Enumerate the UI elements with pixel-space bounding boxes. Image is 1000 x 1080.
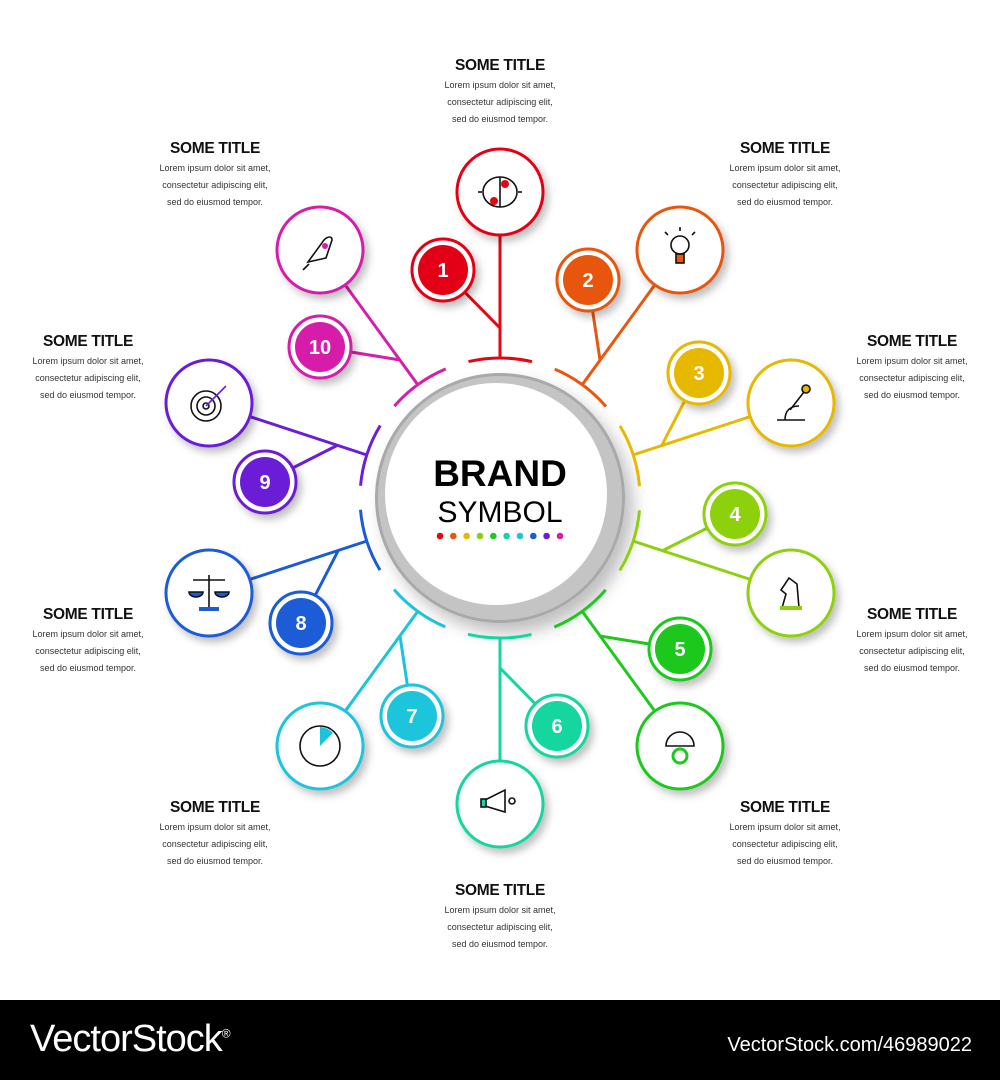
- label: item 3: sed do eiusmod tempor.: [864, 390, 960, 400]
- label: item 3: Lorem ipsum dolor sit amet,: [856, 356, 968, 366]
- icon circles: [166, 149, 834, 847]
- number badges: 1: [437, 260, 449, 282]
- label: item 2: consectetur adipiscing elit,: [732, 180, 838, 190]
- icon: bulb: [665, 227, 695, 263]
- icon: brain: [478, 177, 522, 207]
- label: item 5: [729, 799, 841, 866]
- footer url: VectorStock.com/46989022: [727, 1034, 972, 1056]
- label: item 3: [856, 333, 968, 400]
- label: item 1: consectetur adipiscing elit,: [447, 97, 553, 107]
- label: item 5: Lorem ipsum dolor sit amet,: [729, 822, 841, 832]
- number badges: 6: [551, 716, 563, 738]
- center circle: SYMBOL: [437, 496, 563, 529]
- icon: clock: [300, 726, 340, 766]
- label: item 6: sed do eiusmod tempor.: [452, 939, 548, 949]
- label: item 6: [444, 882, 556, 949]
- label: item 1: sed do eiusmod tempor.: [452, 114, 548, 124]
- label: item 5: SOME TITLE: [740, 799, 830, 816]
- label: item 7: [159, 799, 271, 866]
- icon: megaphone: [481, 790, 515, 812]
- label: item 4: SOME TITLE: [867, 606, 957, 623]
- icons: [189, 177, 810, 812]
- label: item 4: [856, 606, 968, 673]
- label: item 1: SOME TITLE: [455, 57, 545, 74]
- label: item 10: consectetur adipiscing elit,: [162, 180, 268, 190]
- label: item 9: consectetur adipiscing elit,: [35, 373, 141, 383]
- number badges: 9: [259, 472, 271, 494]
- label: item 8: sed do eiusmod tempor.: [40, 663, 136, 673]
- ring segments: [302, 300, 698, 696]
- label: item 6: SOME TITLE: [455, 882, 545, 899]
- icon: helmet gear: [666, 732, 694, 763]
- label: item 4: sed do eiusmod tempor.: [864, 663, 960, 673]
- label: item 5: sed do eiusmod tempor.: [737, 856, 833, 866]
- label: item 7: SOME TITLE: [170, 799, 260, 816]
- label: item 1: [444, 57, 556, 124]
- label: item 8: [32, 606, 144, 673]
- icon: target: [191, 386, 226, 421]
- label: item 4: Lorem ipsum dolor sit amet,: [856, 629, 968, 639]
- icon: microscope: [777, 385, 810, 420]
- label: item 9: SOME TITLE: [43, 333, 133, 350]
- number badges: 3: [693, 363, 705, 385]
- label: item 7: Lorem ipsum dolor sit amet,: [159, 822, 271, 832]
- label: item 8: SOME TITLE: [43, 606, 133, 623]
- label: item 9: sed do eiusmod tempor.: [40, 390, 136, 400]
- label: item 2: Lorem ipsum dolor sit amet,: [729, 163, 841, 173]
- connector lines: [251, 236, 749, 760]
- icon: chess knight: [780, 578, 802, 610]
- number badges: 7: [406, 706, 418, 728]
- color dots: [437, 533, 563, 539]
- label: item 2: SOME TITLE: [740, 140, 830, 157]
- label: item 8: consectetur adipiscing elit,: [35, 646, 141, 656]
- number badges: 8: [295, 613, 307, 635]
- label: item 1: Lorem ipsum dolor sit amet,: [444, 80, 556, 90]
- label: item 10: sed do eiusmod tempor.: [167, 197, 263, 207]
- label: item 10: Lorem ipsum dolor sit amet,: [159, 163, 271, 173]
- number badges: 2: [582, 270, 594, 292]
- label: item 10: [159, 140, 271, 207]
- label: item 7: consectetur adipiscing elit,: [162, 839, 268, 849]
- icon: rocket: [303, 237, 332, 270]
- label: item 10: SOME TITLE: [170, 140, 260, 157]
- number badges: 10: [309, 337, 331, 359]
- label: item 5: consectetur adipiscing elit,: [732, 839, 838, 849]
- label: item 4: consectetur adipiscing elit,: [859, 646, 965, 656]
- number badges: 4: [729, 504, 741, 526]
- label: item 8: Lorem ipsum dolor sit amet,: [32, 629, 144, 639]
- label: item 6: Lorem ipsum dolor sit amet,: [444, 905, 556, 915]
- label: item 9: Lorem ipsum dolor sit amet,: [32, 356, 144, 366]
- label: item 3: consectetur adipiscing elit,: [859, 373, 965, 383]
- label: item 9: [32, 333, 144, 400]
- icon: scales: [189, 575, 229, 611]
- label: item 2: sed do eiusmod tempor.: [737, 197, 833, 207]
- number badges: 5: [674, 639, 686, 661]
- brand text: BRAND: [433, 453, 567, 494]
- center circle: [375, 373, 625, 623]
- number badges: [234, 239, 766, 757]
- footer logo: VectorStock®: [30, 1018, 230, 1060]
- label: item 6: consectetur adipiscing elit,: [447, 922, 553, 932]
- footer bar: [0, 1000, 1000, 1080]
- label: item 3: SOME TITLE: [867, 333, 957, 350]
- label: item 7: sed do eiusmod tempor.: [167, 856, 263, 866]
- label: item 2: [729, 140, 841, 207]
